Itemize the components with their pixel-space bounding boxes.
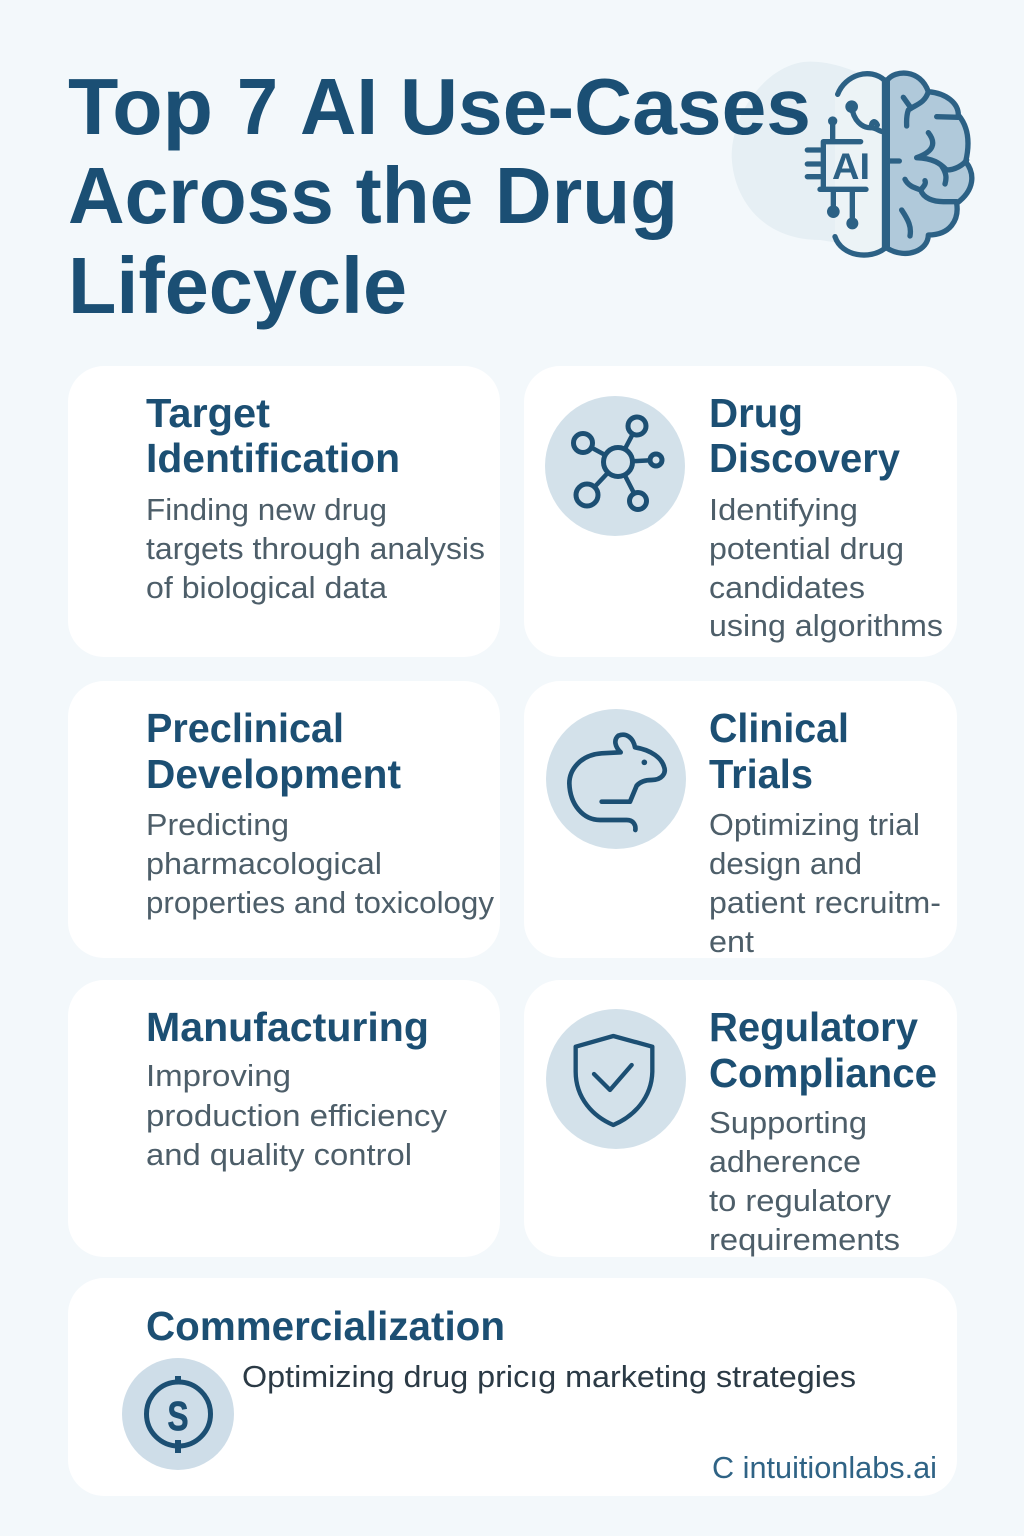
panel: manufacturing <box>68 980 500 1257</box>
panel: regulatory compliance <box>524 980 957 1257</box>
icon: AI brain <box>807 73 972 255</box>
text: regulatory compliance description: adherence <box>709 1144 861 1179</box>
heading: target identification: Target <box>146 390 270 436</box>
text: regulatory compliance description: requirements <box>709 1222 900 1257</box>
icon: shield with check <box>546 1009 686 1149</box>
panel: clinical trials <box>524 681 957 959</box>
heading: commercialization: Commercialization <box>146 1303 505 1349</box>
title <box>68 62 811 330</box>
text: preclinical development description <box>146 807 494 920</box>
icon: lab mouse <box>546 709 686 849</box>
text: preclinical development description: Predicting <box>146 807 289 842</box>
text: preclinical development description: pharmacological <box>146 846 382 881</box>
heading: clinical trials <box>709 705 849 797</box>
icon: dollar coin: S <box>168 1393 188 1439</box>
panel: target identification <box>68 366 500 657</box>
text: drug discovery description <box>709 492 943 643</box>
heading: regulatory compliance: Regulatory <box>709 1004 918 1050</box>
text: drug discovery description: using algorithms <box>709 608 943 643</box>
text: clinical trials description <box>709 807 941 959</box>
text: drug discovery description: Identifying <box>709 492 858 527</box>
text: clinical trials description: patient recruitm- <box>709 885 941 920</box>
panel: drug discovery <box>524 366 957 657</box>
text: regulatory compliance description <box>709 1105 900 1257</box>
icon: molecule network <box>545 396 685 536</box>
icon: AI brain: AI <box>832 146 870 187</box>
text: commercialization description: Optimizing drug pricıg marketing strategies <box>242 1359 856 1394</box>
title: Top <box>68 62 213 151</box>
text: clinical trials description: ent <box>709 924 754 959</box>
title: 7 <box>237 62 278 151</box>
text: target identification description <box>146 492 485 605</box>
icon: dollar coin <box>122 1358 234 1470</box>
heading: regulatory compliance <box>709 1004 937 1096</box>
text: target identification description: Finding new drug <box>146 492 387 527</box>
heading: clinical trials: Trials <box>709 751 813 797</box>
text: manufacturing description: production efficiency <box>146 1098 448 1133</box>
heading: target identification <box>146 390 400 481</box>
text: manufacturing description <box>146 1058 448 1172</box>
text: manufacturing description: and quality control <box>146 1137 412 1172</box>
text: preclinical development description: properties and toxicology <box>146 885 494 920</box>
title: Across the Drug <box>68 151 678 240</box>
heading: preclinical development: Development <box>146 751 401 797</box>
text: drug discovery description: potential drug <box>709 531 904 566</box>
heading: drug discovery <box>709 390 900 481</box>
heading: preclinical development: Preclinical <box>146 705 344 751</box>
decorative blob behind brain <box>732 62 883 250</box>
text: target identification description: of biological data <box>146 570 388 605</box>
panel: preclinical development <box>68 681 500 958</box>
title: AI <box>300 62 378 151</box>
credit: intuitionlabs.ai: C intuitionlabs.ai <box>712 1450 937 1485</box>
text: regulatory compliance description: Supporting <box>709 1105 867 1140</box>
title: Lifecycle <box>68 241 407 330</box>
heading: drug discovery: Drug <box>709 390 803 436</box>
heading: drug discovery: Discovery <box>709 435 900 481</box>
text: drug discovery description: candidates <box>709 570 865 605</box>
heading: target identification: Identification <box>146 435 400 481</box>
title: Use-Cases <box>400 62 811 151</box>
text: regulatory compliance description: to regulatory <box>709 1183 892 1218</box>
heading: manufacturing: Manufacturing <box>146 1004 429 1050</box>
panel: commercialization <box>68 1278 957 1496</box>
heading: clinical trials: Clinical <box>709 705 849 751</box>
text: target identification description: targets through analysis <box>146 531 485 566</box>
text: manufacturing description: Improving <box>146 1058 291 1093</box>
text: clinical trials description: design and <box>709 846 862 881</box>
heading: regulatory compliance: Compliance <box>709 1050 937 1096</box>
heading: preclinical development <box>146 705 401 797</box>
text: clinical trials description: Optimizing trial <box>709 807 920 842</box>
